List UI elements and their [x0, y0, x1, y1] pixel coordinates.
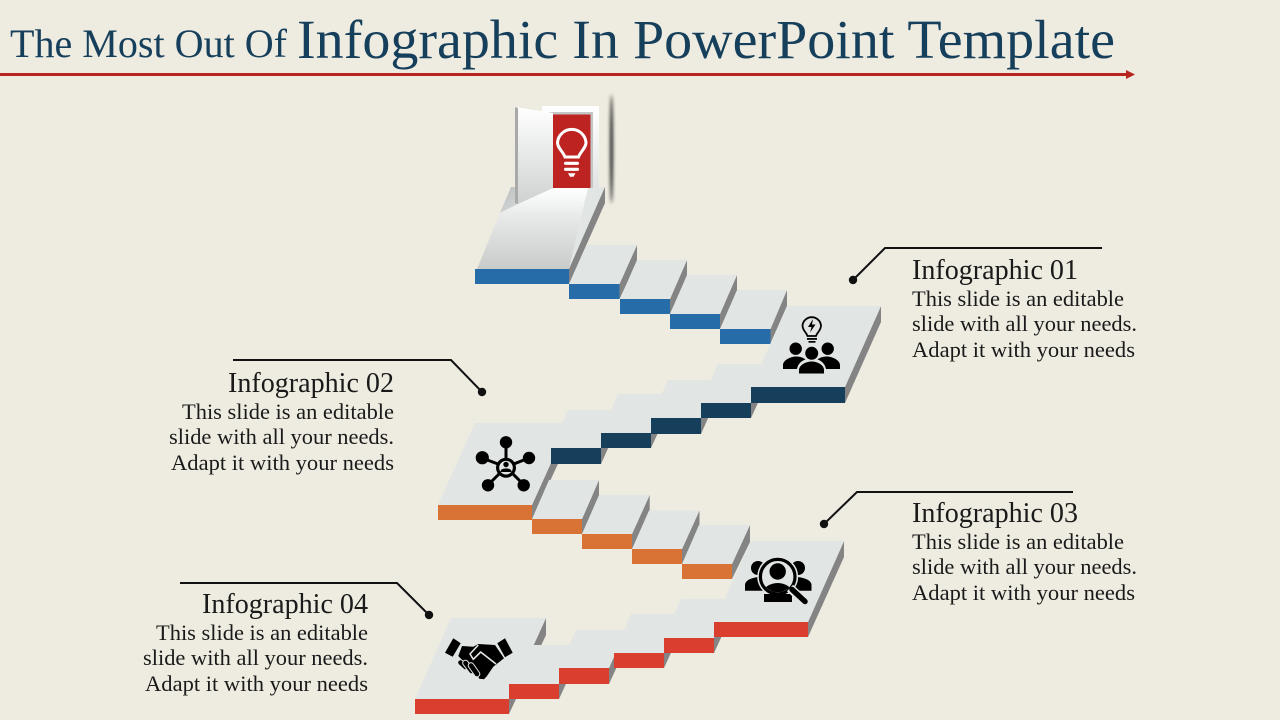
leader line 02: [233, 360, 486, 396]
floor behind door: [500, 187, 530, 213]
text 01: This slide is an editable: [912, 286, 1124, 311]
callout: Infographic 03: [820, 492, 1137, 605]
text 04: slide with all your needs.: [143, 645, 368, 670]
text 04: Infographic 04: [202, 589, 368, 620]
text 01: Infographic 01: [912, 255, 1078, 286]
text 04: [143, 589, 368, 696]
callout: Infographic 04: [143, 583, 433, 696]
orange platform: [438, 423, 569, 520]
leader line 04: [180, 583, 433, 619]
text 03: Adapt it with your needs: [912, 580, 1135, 605]
red platform: [415, 618, 546, 714]
callout: Infographic 01: [849, 248, 1137, 362]
text 03: [912, 498, 1137, 605]
text 02: slide with all your needs.: [169, 424, 394, 449]
text 03: slide with all your needs.: [912, 554, 1137, 579]
text 02: Infographic 02: [228, 368, 394, 399]
door with lightbulb: [477, 95, 613, 269]
icon: network: [476, 436, 535, 491]
text 04: Adapt it with your needs: [145, 671, 368, 696]
callout: Infographic 02: [169, 360, 486, 475]
door shadow: [610, 95, 613, 203]
floor light: [477, 188, 588, 269]
icon: people search: [745, 556, 812, 605]
text 04: This slide is an editable: [156, 620, 368, 645]
text 02: [169, 368, 394, 475]
door leaf: [515, 107, 553, 204]
title: The Most Out Of: [10, 21, 288, 66]
door frame: [542, 106, 599, 188]
blue platform: [475, 187, 605, 284]
red upper platform: [714, 541, 844, 637]
title underline arrow: [0, 70, 1135, 79]
leader line 03: [820, 492, 1073, 528]
text 01: [912, 255, 1137, 362]
text 01: Adapt it with your needs: [912, 337, 1135, 362]
text 02: This slide is an editable: [182, 399, 394, 424]
icon: handshake: [445, 638, 513, 679]
navy platform: [751, 306, 881, 403]
leader line 01: [849, 248, 1102, 284]
icon: idea and team: [783, 317, 840, 374]
navy stairs: [551, 306, 881, 464]
blue stairs: [475, 187, 787, 344]
red door opening: [553, 114, 590, 188]
title: Infographic In PowerPoint Template: [297, 9, 1115, 70]
text 02: Adapt it with your needs: [171, 450, 394, 475]
lightbulb icon: [558, 129, 586, 177]
orange stairs: [438, 423, 750, 579]
text 01: slide with all your needs.: [912, 311, 1137, 336]
red stairs: [415, 541, 844, 714]
text 03: Infographic 03: [912, 498, 1078, 529]
text 03: This slide is an editable: [912, 529, 1124, 554]
